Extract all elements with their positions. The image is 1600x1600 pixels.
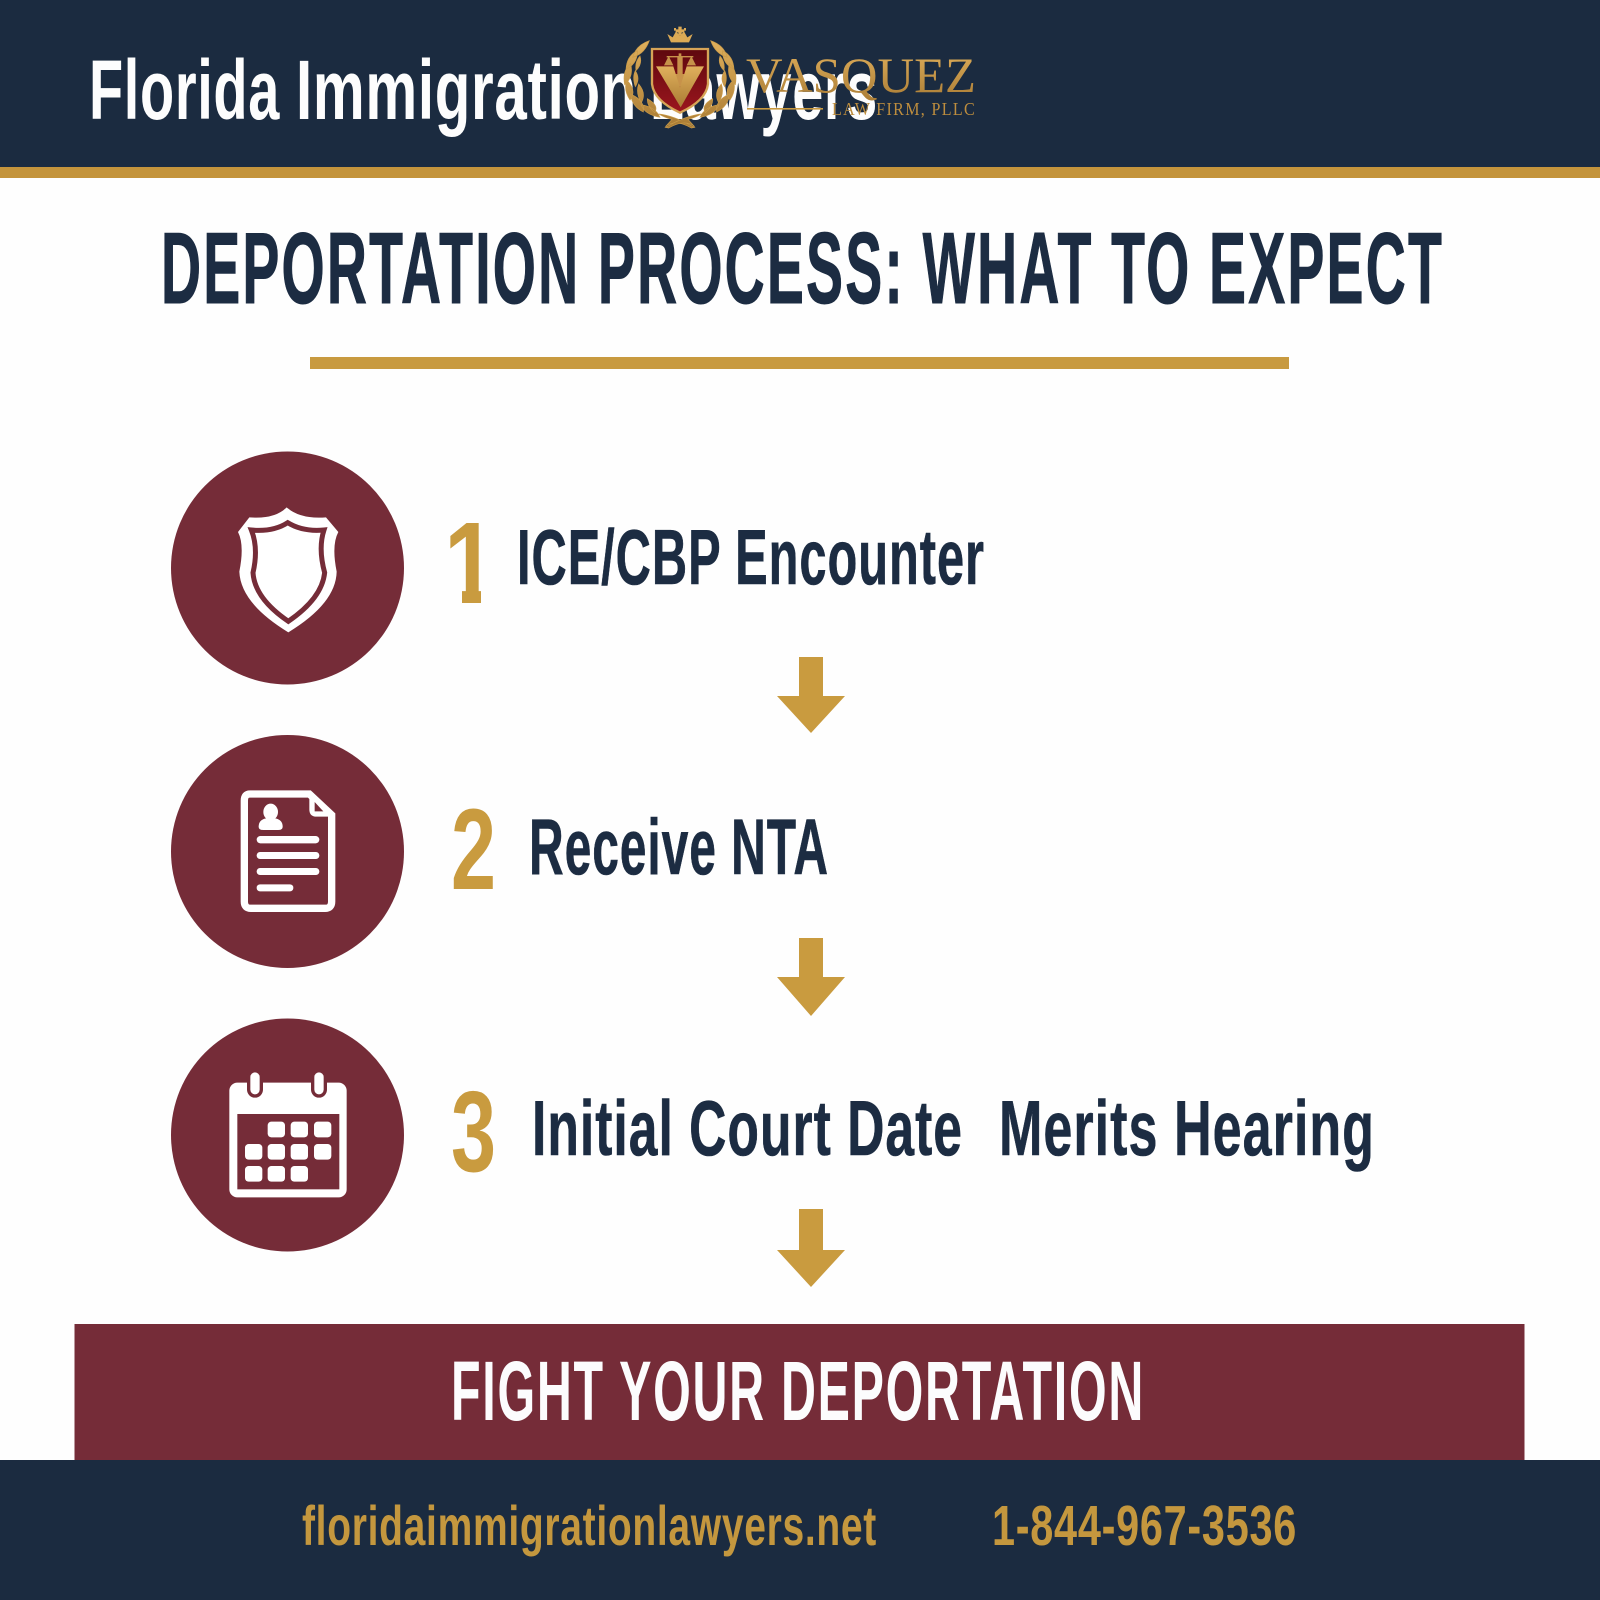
step 1 label: ICE/CBP Encounter [517, 513, 985, 601]
arrow 3 [777, 1209, 845, 1287]
step 1 [171, 452, 985, 684]
law firm logo [624, 27, 976, 128]
step 2 number: 2 [451, 786, 496, 914]
title rule [310, 357, 1289, 369]
header band [0, 0, 1600, 178]
step 2 label: Receive NTA [529, 802, 829, 891]
step 2 [171, 735, 829, 968]
header title: Immigration [296, 43, 637, 137]
footer band [0, 1460, 1600, 1600]
arrow 2 [777, 938, 845, 1016]
header title [89, 43, 878, 137]
step 1 number: 1 [444, 498, 496, 628]
icon: document [171, 735, 404, 968]
step 3 [171, 1018, 1375, 1252]
call to action banner [74, 1324, 1524, 1460]
logo underline [747, 108, 823, 110]
footer phone: 1-844-967-3536 [992, 1494, 1297, 1558]
logo wordmark: VASQUEZ [746, 47, 976, 103]
step 3 label: merits hearing: Merits Hearing [999, 1084, 1375, 1172]
logo emblem [624, 27, 736, 128]
logo subtitle: LAW FIRM, PLLC [832, 99, 976, 119]
header title: Florida [89, 43, 280, 137]
icon: shield [171, 452, 404, 684]
footer website: floridaimmigrationlawyers.net [302, 1494, 877, 1557]
icon: calendar [171, 1018, 404, 1252]
step 3 label: initial court date: Initial Court Date [532, 1084, 963, 1172]
header title: Lawyers [650, 43, 878, 137]
step 3 number: 3 [451, 1068, 496, 1196]
arrow 1 [777, 657, 845, 733]
